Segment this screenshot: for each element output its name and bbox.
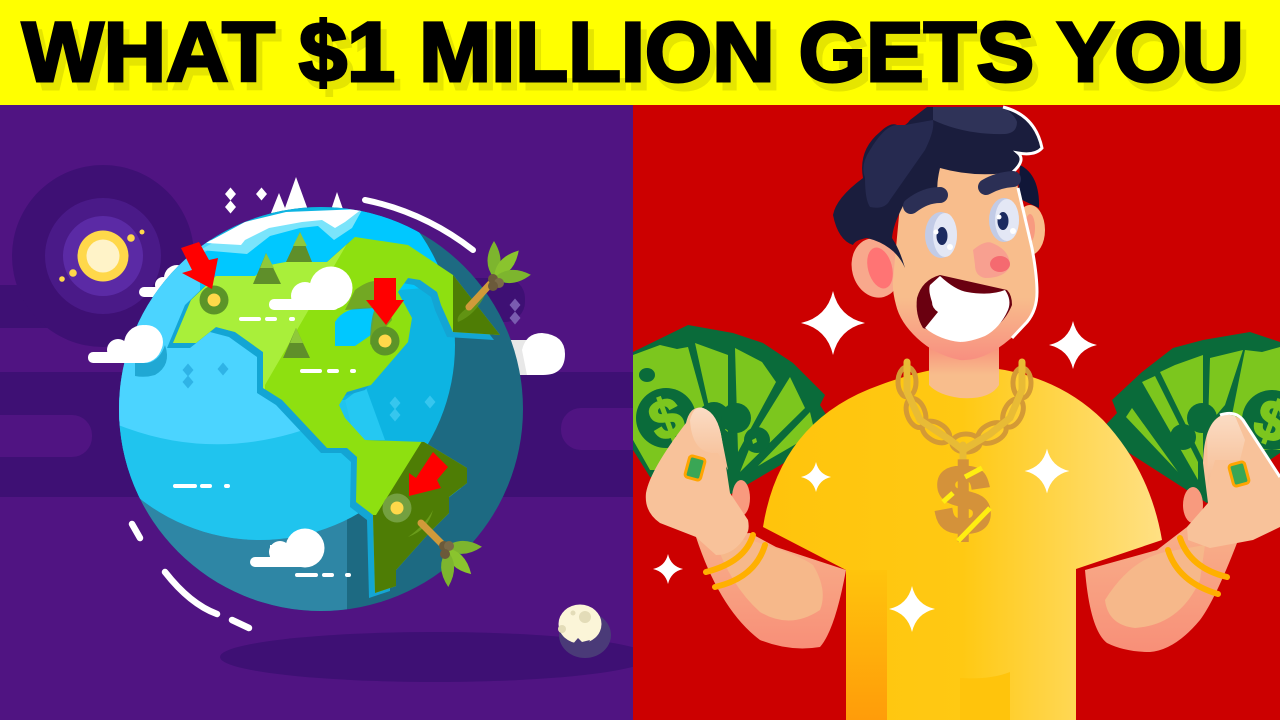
yellow t-shirt <box>763 366 1162 720</box>
icon: palm tree north <box>458 241 531 322</box>
right arm <box>1085 413 1280 652</box>
title banner: WHAT $1 MILLION GETS YOU <box>22 5 1244 99</box>
icon: trees <box>253 232 312 358</box>
bracelets <box>706 535 1227 594</box>
wind dashes <box>175 319 354 575</box>
cloud shadow <box>135 345 167 377</box>
rings <box>684 455 1250 487</box>
right ear <box>1015 205 1045 255</box>
coast rim <box>167 242 494 598</box>
icon: cloud behind globe right <box>505 333 565 375</box>
eyebrows <box>911 179 1013 206</box>
neck <box>929 340 999 398</box>
hair and face white outline <box>1003 107 1042 338</box>
dollar pendant: $ <box>937 447 989 552</box>
icon: money fan right <box>1098 332 1280 503</box>
icon: location pins <box>200 286 412 522</box>
gold chain <box>898 362 1031 466</box>
title banner: WHAT $1 MILLION GETS YOU <box>28 13 1250 107</box>
icon: money fan left <box>633 325 837 497</box>
orbit arcs <box>132 200 473 628</box>
panel: red background <box>633 105 1280 720</box>
man figure <box>646 107 1280 720</box>
icon: purple diamonds <box>510 298 520 324</box>
panel: purple space background <box>0 105 661 720</box>
icon: red arrows <box>181 242 448 496</box>
left arm <box>646 408 846 648</box>
icon: snowy mountains <box>271 177 344 213</box>
icon: clouds on globe <box>88 266 352 568</box>
hair <box>833 107 1042 268</box>
icon: cloud behind globe left <box>139 265 190 297</box>
icon: sparkles <box>653 291 1097 632</box>
icon: sun <box>12 165 194 347</box>
mouth <box>917 275 1012 342</box>
face <box>893 165 1037 360</box>
shirt fold right <box>960 672 1010 720</box>
shirt fold left <box>846 570 887 720</box>
icon: moon <box>558 604 611 658</box>
eyes <box>925 198 1019 258</box>
polar ice <box>200 210 362 254</box>
icon: globe with continents <box>119 207 523 611</box>
hudson bay <box>335 308 375 346</box>
icon: money fan left: $ <box>641 384 692 453</box>
left ear <box>845 233 907 303</box>
back hair <box>1018 165 1039 208</box>
icon: white sparkle diamonds <box>225 188 267 214</box>
icon: ocean diamonds <box>182 362 436 422</box>
nose <box>973 242 1010 278</box>
continent <box>173 237 500 593</box>
icon: palm tree south <box>408 510 482 587</box>
